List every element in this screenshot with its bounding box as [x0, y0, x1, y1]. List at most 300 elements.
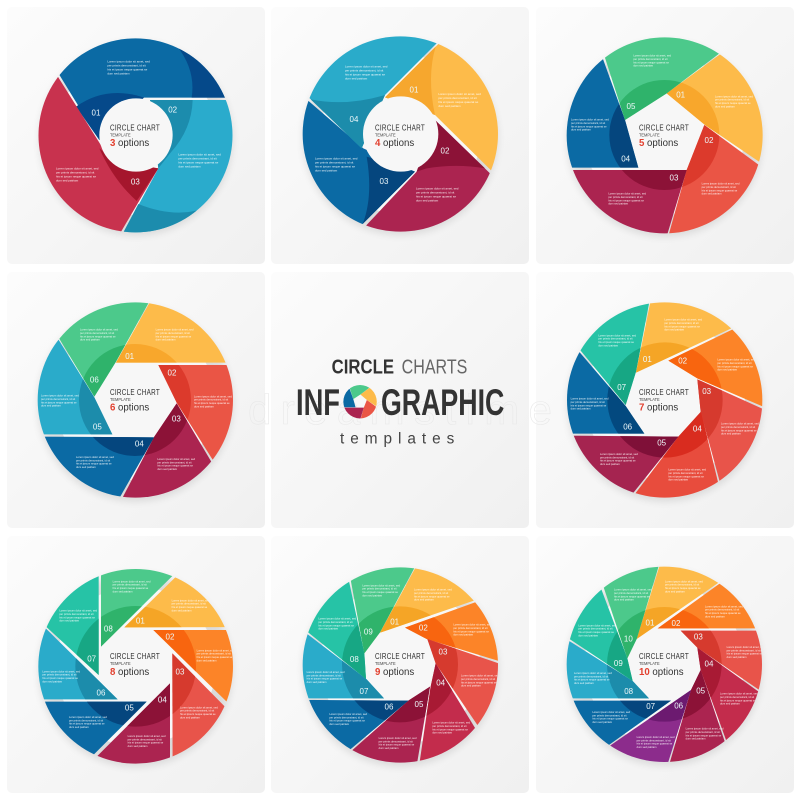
segment 02: per primis demonstrant, id sit: [702, 185, 736, 189]
segment 06: 06: [385, 702, 394, 711]
center label: [110, 652, 160, 678]
segment 04: [416, 663, 490, 789]
center label: 3 options: [110, 138, 149, 149]
segment 04: [98, 683, 170, 764]
center label: [639, 388, 689, 413]
segment 05: [605, 37, 719, 120]
segment 01: dum sed patriam: [438, 104, 461, 108]
segment 03: 03: [380, 177, 389, 186]
segment 02: his et ipsum neque quaerat se: [717, 364, 753, 368]
segment 01: his et ipsum neque quaerat se: [664, 324, 700, 328]
segment 07: 07: [360, 687, 369, 696]
segment 01: [636, 302, 731, 373]
segment 08: Lorem ipsum dolor sit amet, sed: [318, 617, 357, 621]
center hole: [99, 98, 173, 172]
segment 03: dum sed patriam: [157, 467, 178, 471]
segment 03: dum sed patriam: [608, 202, 629, 206]
segment 03: per primis demonstrant, id sit: [56, 171, 94, 175]
segment 06: per primis demonstrant, id sit: [80, 331, 114, 335]
segment 03: per primis demonstrant, id sit: [157, 460, 192, 464]
segment 10: [595, 538, 667, 658]
segment 01: dum sed patriam: [172, 608, 192, 612]
segment 07: per primis demonstrant, id sit: [59, 612, 94, 616]
segment 06: dum sed patriam: [80, 338, 101, 342]
segment 04: his et ipsum neque quaerat se: [571, 124, 607, 128]
segment 07: Lorem ipsum dolor sit amet, sed: [592, 710, 631, 714]
segment 08: per primis demonstrant, id sit: [318, 620, 353, 624]
segment 10: Lorem ipsum dolor sit amet, sed: [614, 588, 652, 592]
segment 04: his et ipsum neque quaerat se: [345, 72, 385, 76]
segment 01: 01: [676, 90, 686, 99]
segment 10: his et ipsum neque quaerat se: [614, 594, 650, 598]
segment 03: dum sed patriam: [56, 179, 79, 183]
segment 08: 08: [624, 687, 634, 696]
segment 08: [536, 625, 649, 698]
segment 08: [285, 553, 366, 679]
segment 07: dum sed patriam: [598, 343, 619, 347]
segment 03: per primis demonstrant, id sit: [608, 195, 643, 199]
segment 03: his et ipsum neque quaerat se: [180, 712, 216, 716]
segment 05: dum sed patriam: [633, 64, 654, 68]
segment 07: Lorem ipsum dolor sit amet, sed: [307, 670, 345, 674]
segment 05: [662, 670, 734, 791]
center label: CIRCLE CHART: [375, 124, 425, 133]
center label: TEMPLATE: [639, 397, 660, 402]
segment 03: [427, 639, 527, 750]
segment 05: his et ipsum neque quaerat se: [379, 743, 415, 747]
segment 09: 09: [364, 628, 373, 637]
segment 02: dum sed patriam: [178, 165, 201, 169]
segment 03: dum sed patriam: [461, 684, 482, 688]
segment 04: his et ipsum neque quaerat se: [76, 462, 112, 466]
segment 04: per primis demonstrant, id sit: [571, 121, 605, 125]
title: circle charts: [332, 355, 467, 378]
segment 02: dum sed patriam: [197, 658, 217, 662]
segment 02: 02: [168, 105, 178, 114]
segment 04: dum sed patriam: [720, 702, 741, 706]
center label: 7 options: [639, 402, 678, 413]
segment 02: per primis demonstrant, id sit: [705, 608, 739, 612]
segment 05: his et ipsum neque quaerat se: [633, 60, 669, 64]
segment 07: 07: [87, 655, 97, 664]
segment 03: his et ipsum neque quaerat se: [461, 680, 497, 684]
segment 05: dum sed patriam: [41, 404, 62, 408]
segment 01: per primis demonstrant, id sit: [414, 591, 448, 595]
segment 03: his et ipsum neque quaerat se: [608, 198, 644, 202]
segment 08: [101, 531, 201, 647]
segment 01: his et ipsum neque quaerat se: [414, 594, 450, 598]
panel: 7 options background: [536, 272, 794, 528]
segment 02: dum sed patriam: [194, 404, 215, 408]
segment 02: [124, 100, 232, 232]
segment 03: 03: [694, 633, 703, 642]
segment 07: [534, 701, 671, 762]
panel: 10 options background: [536, 536, 794, 793]
center label: CIRCLE CHART: [110, 652, 160, 661]
segment 02: Lorem ipsum dolor sit amet, sed: [194, 394, 232, 398]
chart: 6 options: [36, 302, 234, 503]
segment 05: per primis demonstrant, id sit: [600, 455, 634, 459]
segment 02: per primis demonstrant, id sit: [717, 361, 752, 365]
segment 07: his et ipsum neque quaerat se: [598, 340, 634, 344]
segment 01: 01: [646, 618, 655, 627]
segment 02: 02: [672, 619, 681, 628]
segment 02: 02: [419, 623, 428, 632]
segment 02: his et ipsum neque quaerat se: [416, 195, 456, 199]
segment 03: 03: [702, 387, 712, 396]
segment 02: Lorem ipsum dolor sit amet, sed: [178, 153, 221, 157]
segment 05: his et ipsum neque quaerat se: [41, 400, 77, 404]
segment 04: dum sed patriam: [668, 478, 689, 482]
title: infographic: GRAPHIC: [381, 382, 504, 423]
segment 09: per primis demonstrant, id sit: [362, 587, 397, 591]
segment 06: 06: [97, 688, 106, 697]
title: infographic: [296, 382, 504, 423]
segment 08: per primis demonstrant, id sit: [113, 583, 147, 587]
segment 02: [158, 365, 269, 482]
segment 01: [60, 38, 225, 140]
segment 02: [366, 120, 490, 232]
segment 05: Lorem ipsum dolor sit amet, sed: [41, 394, 79, 398]
segment 05: dum sed patriam: [379, 746, 399, 750]
segment 03: dum sed patriam: [727, 655, 747, 659]
segment 01: his et ipsum neque quaerat se: [715, 101, 751, 105]
segment 03: 03: [670, 174, 679, 183]
segment 03: 03: [131, 178, 140, 187]
center label: 4 options: [375, 138, 414, 149]
segment 01: per primis demonstrant, id sit: [438, 96, 477, 100]
segment 01: his et ipsum neque quaerat se: [156, 334, 192, 338]
center label: [110, 388, 160, 413]
segment 02: Lorem ipsum dolor sit amet, sed: [702, 182, 740, 186]
center label: TEMPLATE: [110, 133, 131, 138]
segment 02: [153, 630, 274, 730]
segment 01: [380, 543, 511, 633]
segment 07: his et ipsum neque quaerat se: [59, 615, 95, 619]
segment 06: Lorem ipsum dolor sit amet, sed: [80, 328, 118, 332]
segment 06: his et ipsum neque quaerat se: [329, 719, 365, 723]
segment 07: Lorem ipsum dolor sit amet, sed: [598, 333, 637, 337]
segment 03: [681, 631, 792, 706]
segment 01: Lorem ipsum dolor sit amet, sed: [156, 328, 194, 332]
segment 04: Lorem ipsum dolor sit amet, sed: [128, 734, 166, 738]
segment 01: [637, 537, 749, 639]
segment 02: [668, 319, 790, 417]
segment 05: per primis demonstrant, id sit: [379, 739, 413, 743]
segment 09: [545, 563, 633, 681]
segment 05: dum sed patriam: [69, 725, 90, 729]
center label: 8 options: [110, 667, 149, 678]
segment 01: dum sed patriam: [414, 598, 435, 602]
segment 07: [580, 304, 649, 405]
segment 02: per primis demonstrant, id sit: [178, 157, 217, 161]
segment 02: [662, 125, 779, 260]
segment 01: 01: [643, 355, 652, 364]
segment 06: dum sed patriam: [42, 679, 63, 683]
segment 03: Lorem ipsum dolor sit amet, sed: [727, 645, 765, 649]
segment 03: Lorem ipsum dolor sit amet, sed: [608, 192, 647, 196]
segment 05: per primis demonstrant, id sit: [69, 718, 103, 722]
segment 07: his et ipsum neque quaerat se: [307, 677, 343, 681]
segment 05: Lorem ipsum dolor sit amet, sed: [379, 736, 417, 740]
segment 04: 04: [135, 440, 144, 449]
segment 08: per primis demonstrant, id sit: [574, 674, 608, 678]
segment 01: 01: [410, 86, 419, 95]
center label: CIRCLE CHART: [639, 124, 689, 133]
segment 04: [44, 436, 154, 496]
segment 05: his et ipsum neque quaerat se: [600, 459, 636, 463]
segment 06: [269, 700, 408, 767]
segment 04: Lorem ipsum dolor sit amet, sed: [76, 455, 114, 459]
segment 07: his et ipsum neque quaerat se: [592, 717, 628, 721]
segment 03: Lorem ipsum dolor sit amet, sed: [56, 167, 99, 171]
segment 04: [636, 412, 718, 498]
segment 03: Lorem ipsum dolor sit amet, sed: [315, 157, 358, 161]
segment 03: [38, 77, 158, 232]
segment 06: Lorem ipsum dolor sit amet, sed: [571, 397, 609, 401]
segment 01: Lorem ipsum dolor sit amet, sed: [715, 94, 753, 98]
segment 05: per primis demonstrant, id sit: [686, 730, 720, 734]
center label: TEMPLATE: [639, 133, 660, 138]
segment 05: dum sed patriam: [686, 737, 706, 741]
segment 02: per primis demonstrant, id sit: [197, 652, 231, 656]
segment 04: his et ipsum neque quaerat se: [720, 698, 756, 702]
segment 05: dum sed patriam: [600, 462, 621, 466]
segment 06: 06: [623, 422, 633, 431]
segment 01: dum sed patriam: [664, 328, 685, 332]
segment 07: dum sed patriam: [307, 680, 327, 684]
segment 03: his et ipsum neque quaerat se: [56, 175, 96, 179]
segment 04: dum sed patriam: [345, 76, 368, 80]
segment 05: 05: [627, 102, 636, 111]
segment 02: his et ipsum neque quaerat se: [178, 161, 219, 165]
segment 04: [566, 59, 638, 168]
segment 08: 08: [104, 625, 113, 634]
segment 09: 09: [614, 659, 623, 668]
segment 02: his et ipsum neque quaerat se: [194, 401, 230, 405]
center label: CIRCLE CHART: [110, 388, 160, 397]
panel: 3 options background: [7, 7, 265, 264]
center label: 9 options: [375, 667, 414, 678]
segment 09: Lorem ipsum dolor sit amet, sed: [362, 583, 401, 587]
chart: 10 options: [534, 537, 795, 792]
segment 05: 05: [93, 422, 102, 431]
segment 04: per primis demonstrant, id sit: [668, 471, 703, 475]
segment 01: [385, 44, 498, 170]
center label: TEMPLATE: [110, 397, 131, 402]
title: infographic: INF: [296, 382, 340, 423]
segment 04: his et ipsum neque quaerat se: [128, 741, 164, 745]
segment 08: his et ipsum neque quaerat se: [318, 623, 354, 627]
segment 01: Lorem ipsum dolor sit amet, sed: [665, 579, 703, 583]
segment 03: Lorem ipsum dolor sit amet, sed: [721, 422, 759, 426]
icon: shutter logo: [343, 385, 377, 418]
segment 01: per primis demonstrant, id sit: [156, 331, 190, 335]
segment 02: 02: [441, 146, 450, 155]
segment 06: Lorem ipsum dolor sit amet, sed: [637, 735, 675, 739]
segment 03: dum sed patriam: [721, 432, 742, 436]
segment 02: dum sed patriam: [416, 199, 439, 203]
segment 08: his et ipsum neque quaerat se: [574, 678, 610, 682]
segment 03: Lorem ipsum dolor sit amet, sed: [157, 457, 196, 461]
segment 01: 01: [136, 616, 145, 625]
segment 02: his et ipsum neque quaerat se: [702, 188, 738, 192]
segment 03: per primis demonstrant, id sit: [461, 677, 495, 681]
segment 04: per primis demonstrant, id sit: [720, 695, 754, 699]
segment 02: dum sed patriam: [702, 192, 722, 196]
segment 01: his et ipsum neque quaerat se: [438, 100, 479, 104]
panel: title background: [271, 272, 529, 528]
segment 05: Lorem ipsum dolor sit amet, sed: [633, 54, 672, 58]
segment 02: Lorem ipsum dolor sit amet, sed: [197, 648, 235, 652]
segment 02: 02: [678, 357, 688, 366]
segment 01: Lorem ipsum dolor sit amet, sed: [107, 59, 150, 63]
segment 07: dum sed patriam: [592, 720, 613, 724]
segment 08: his et ipsum neque quaerat se: [113, 586, 149, 590]
segment 03: [172, 653, 245, 795]
segment 07: dum sed patriam: [59, 619, 80, 623]
segment 02: per primis demonstrant, id sit: [194, 398, 228, 402]
chart: 9 options: [269, 538, 528, 791]
title: circle charts: CIRCLE: [332, 355, 394, 378]
segment 05: [331, 687, 430, 791]
segment 09: [346, 538, 428, 653]
segment 01: per primis demonstrant, id sit: [665, 583, 699, 587]
segment 01: dum sed patriam: [156, 338, 176, 342]
segment 06: his et ipsum neque quaerat se: [571, 403, 607, 407]
segment 07: Lorem ipsum dolor sit amet, sed: [59, 609, 98, 613]
panel: 9 options background: [271, 536, 529, 793]
title block: [296, 355, 504, 447]
segment 01: 01: [92, 109, 101, 118]
segment 03: per primis demonstrant, id sit: [180, 709, 214, 713]
segment 06: Lorem ipsum dolor sit amet, sed: [329, 712, 368, 716]
panel: 8 options background: [7, 536, 265, 793]
segment 06: dum sed patriam: [637, 745, 657, 749]
segment 02: [658, 568, 795, 628]
segment 05: [574, 436, 678, 492]
segment 03: per primis demonstrant, id sit: [315, 161, 353, 165]
center label: TEMPLATE: [639, 661, 660, 666]
segment 01: his et ipsum neque quaerat se: [107, 67, 148, 71]
segment 06: per primis demonstrant, id sit: [329, 715, 364, 719]
segment 04: Lorem ipsum dolor sit amet, sed: [668, 468, 707, 472]
segment 09: his et ipsum neque quaerat se: [362, 590, 398, 594]
segment 06: dum sed patriam: [329, 722, 350, 726]
segment 01: dum sed patriam: [665, 589, 686, 593]
segment 06: per primis demonstrant, id sit: [42, 673, 77, 677]
segment 07: per primis demonstrant, id sit: [592, 713, 627, 717]
segment 05: Lorem ipsum dolor sit amet, sed: [686, 727, 724, 731]
segment 04: his et ipsum neque quaerat se: [668, 474, 704, 478]
center label: 6 options: [110, 402, 149, 413]
segment 06: 06: [674, 702, 684, 711]
segment 10: dum sed patriam: [614, 598, 635, 602]
segment 04: per primis demonstrant, id sit: [128, 737, 162, 741]
segment 08: dum sed patriam: [318, 627, 339, 631]
chart: 5 options: [566, 37, 764, 238]
segment 09: his et ipsum neque quaerat se: [578, 630, 614, 634]
segment 09: dum sed patriam: [578, 633, 599, 637]
segment 02: per primis demonstrant, id sit: [416, 191, 454, 195]
segment 03: his et ipsum neque quaerat se: [315, 165, 355, 169]
center label: 5 options: [639, 138, 678, 149]
chart: 3 options: [38, 38, 234, 237]
segment 06: per primis demonstrant, id sit: [571, 400, 605, 404]
segment 02: 02: [166, 632, 175, 641]
center label: [375, 124, 425, 149]
segment 07: 07: [646, 702, 656, 711]
segment 04: his et ipsum neque quaerat se: [432, 727, 468, 731]
segment 03: Lorem ipsum dolor sit amet, sed: [461, 674, 499, 678]
segment 01: Lorem ipsum dolor sit amet, sed: [414, 588, 452, 592]
segment 02: 02: [168, 368, 177, 377]
segment 01: 01: [390, 617, 400, 626]
segment 07: per primis demonstrant, id sit: [307, 673, 341, 677]
segment 05: Lorem ipsum dolor sit amet, sed: [69, 715, 107, 719]
segment 04: 04: [621, 155, 631, 164]
center label: [639, 652, 689, 678]
segment 06: his et ipsum neque quaerat se: [80, 334, 116, 338]
segment 06: [579, 690, 691, 792]
segment 05: per primis demonstrant, id sit: [41, 397, 75, 401]
segment 03: per primis demonstrant, id sit: [727, 648, 761, 652]
segment 04: dum sed patriam: [432, 731, 453, 735]
segment 04: 04: [350, 115, 359, 124]
segment 08: dum sed patriam: [574, 681, 595, 685]
segment 03: dum sed patriam: [180, 715, 201, 719]
segment 06: dum sed patriam: [571, 407, 591, 411]
segment 04: Lorem ipsum dolor sit amet, sed: [345, 64, 388, 68]
chart: 7 options: [566, 302, 764, 503]
segment 03: 03: [439, 648, 448, 657]
segment 04: 04: [705, 659, 714, 668]
segment 04: per primis demonstrant, id sit: [432, 724, 467, 728]
segment 05: 05: [415, 700, 424, 709]
segment 03: 03: [176, 667, 185, 676]
segment 01: per primis demonstrant, id sit: [172, 602, 206, 606]
segment 06: [59, 302, 148, 397]
segment 05: his et ipsum neque quaerat se: [686, 733, 722, 737]
center hole: [363, 96, 438, 172]
subtitle: templates: templates: [340, 430, 455, 447]
segment 03: dum sed patriam: [315, 169, 338, 173]
chart: 4 options: [302, 36, 500, 236]
panel: 5 options background: [536, 7, 794, 264]
segment 09: dum sed patriam: [362, 593, 383, 597]
segment 04: dum sed patriam: [128, 744, 148, 748]
title: circle charts: CHARTS: [402, 355, 467, 378]
segment 08: Lorem ipsum dolor sit amet, sed: [574, 671, 612, 675]
segment 01: per primis demonstrant, id sit: [107, 63, 146, 67]
segment 03: [110, 403, 224, 527]
segment 04: per primis demonstrant, id sit: [76, 458, 110, 462]
segment 02: his et ipsum neque quaerat se: [197, 655, 233, 659]
center label: TEMPLATE: [375, 661, 396, 666]
segment 06: Lorem ipsum dolor sit amet, sed: [42, 669, 81, 673]
segment 01: [667, 40, 794, 176]
watermark: dreamstime: [248, 386, 552, 433]
segment 06: [567, 352, 644, 434]
segment 01: per primis demonstrant, id sit: [715, 98, 749, 102]
center label: TEMPLATE: [375, 133, 396, 138]
segment 05: Lorem ipsum dolor sit amet, sed: [600, 452, 638, 456]
segment 02: dum sed patriam: [705, 614, 726, 618]
center label: CIRCLE CHART: [639, 388, 689, 397]
segment 01: per primis demonstrant, id sit: [664, 321, 699, 325]
segment 10: 10: [624, 634, 633, 643]
center label: CIRCLE CHART: [110, 124, 160, 133]
